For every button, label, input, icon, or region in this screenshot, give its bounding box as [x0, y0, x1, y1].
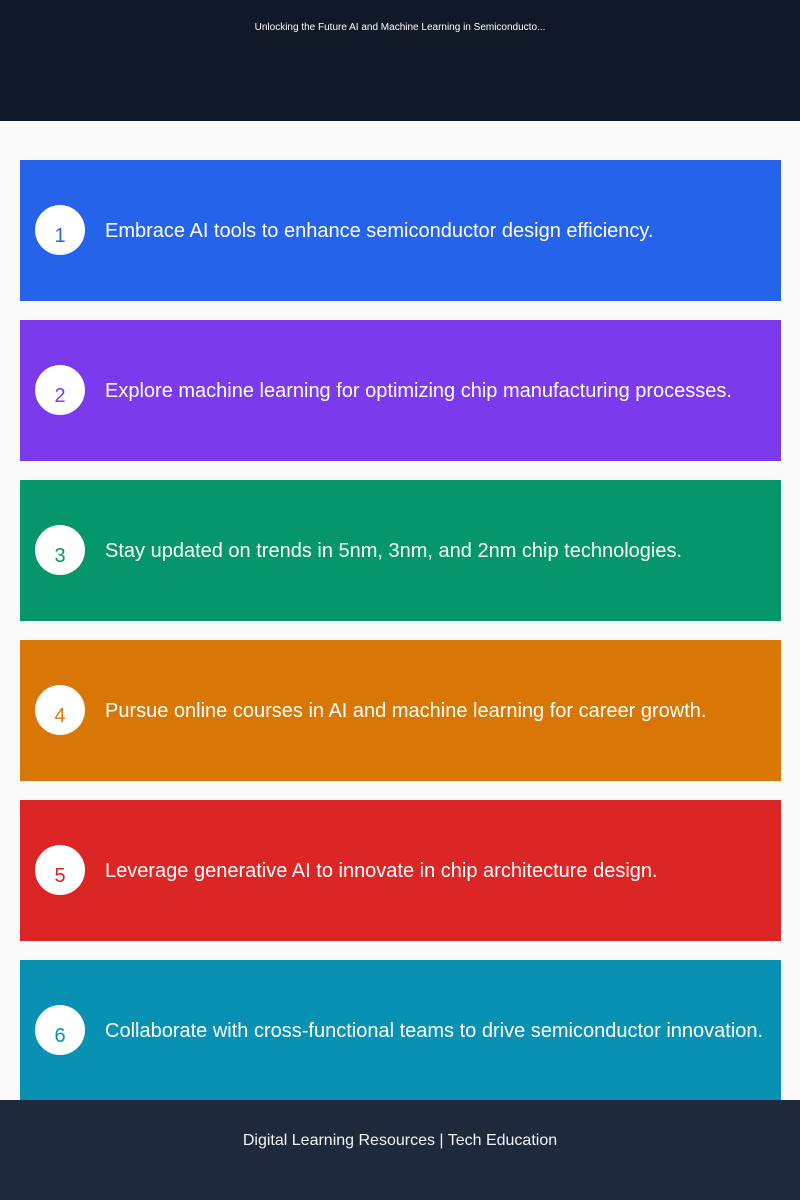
icon: number circle 4: [35, 685, 85, 735]
panel: step 3: [20, 480, 781, 621]
icon: number circle 2: [35, 365, 85, 415]
footer text: Digital Learning Resources | Tech Education: [243, 1132, 557, 1149]
icon: number circle 5: [35, 845, 85, 895]
text: step 6: Collaborate with cross-functional teams to drive semiconductor innovation.: [105, 1020, 763, 1042]
panel: step 5: [20, 800, 781, 941]
text: step 4: Pursue online courses in AI and machine learning for career growth.: [105, 700, 706, 722]
title: Unlocking the Future AI and Machine Learning in Semiconducto...: [255, 22, 545, 33]
icon: number circle 3: 3: [54, 545, 66, 567]
text: step 2: Explore machine learning for optimizing chip manufacturing processes.: [105, 380, 732, 402]
icon: number circle 6: [35, 1005, 85, 1055]
icon: number circle 3: [35, 525, 85, 575]
text: step 1: Embrace AI tools to enhance semiconductor design efficiency.: [105, 220, 653, 242]
panel: step 6: [20, 960, 781, 1101]
panel: step 4: [20, 640, 781, 781]
panel: step 2: [20, 320, 781, 461]
icon: number circle 1: [35, 205, 85, 255]
header: [0, 0, 800, 121]
panel: step 1: [20, 160, 781, 301]
icon: number circle 5: 5: [54, 865, 66, 887]
text: step 5: Leverage generative AI to innovate in chip architecture design.: [105, 860, 658, 882]
icon: number circle 1: 1: [54, 225, 66, 247]
icon: number circle 4: 4: [54, 705, 66, 727]
icon: number circle 6: 6: [54, 1025, 66, 1047]
text: step 3: Stay updated on trends in 5nm, 3nm, and 2nm chip technologies.: [105, 540, 682, 562]
footer: [0, 1100, 800, 1200]
icon: number circle 2: 2: [54, 385, 66, 407]
